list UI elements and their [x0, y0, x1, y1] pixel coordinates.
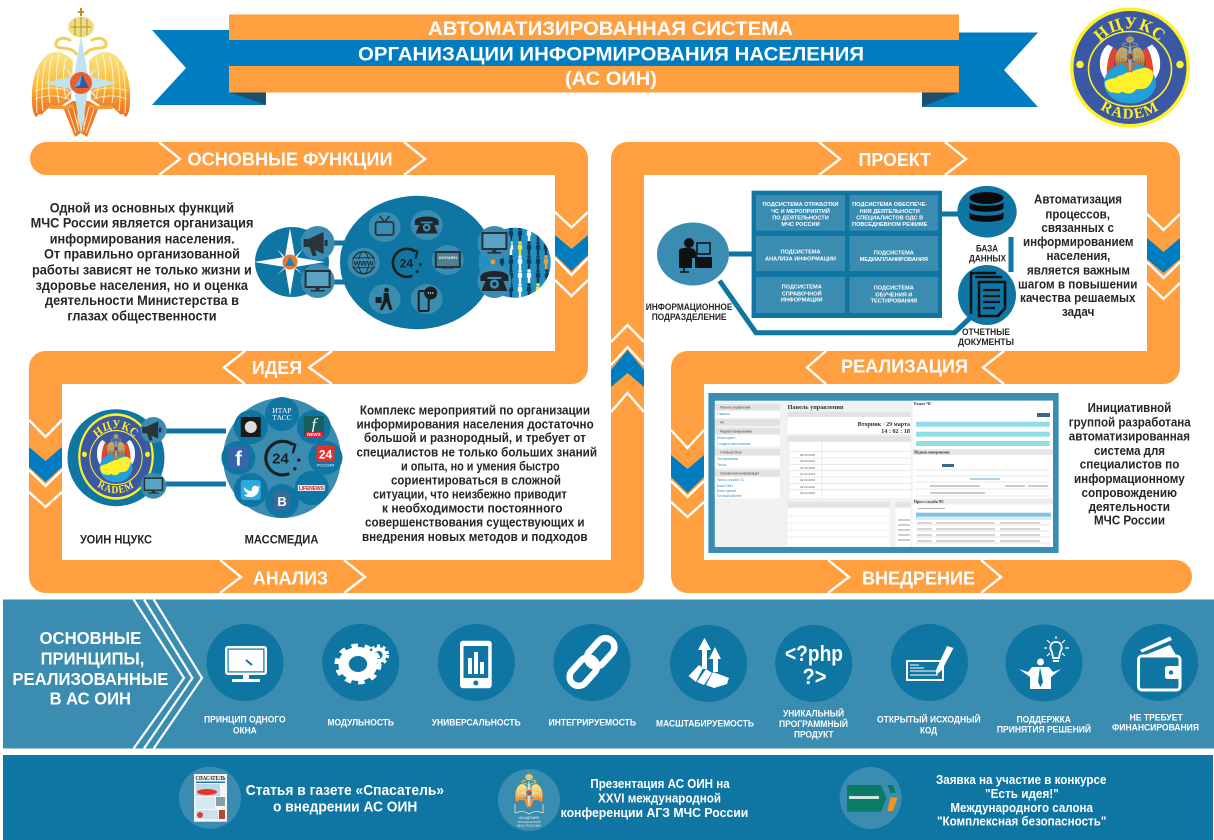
icon: monitor — [477, 226, 511, 260]
text block: idea: ситуации, что неизбежно приводит — [373, 486, 567, 502]
icon: 24 hours — [393, 249, 420, 277]
node: mass media circle — [221, 397, 342, 518]
right area — [913, 402, 1053, 543]
text block: realization: информационному — [1074, 471, 1185, 486]
logo: NCUKS badge: RADEM — [1100, 100, 1158, 119]
label: reports — [958, 327, 1014, 347]
principle: single window: ПРИНЦИП ОДНОГО — [204, 714, 286, 724]
node: UOIN badge: НЦУКС — [92, 420, 138, 438]
heading: idea: ИДЕЯ — [252, 358, 302, 378]
text: conference presentation — [561, 776, 748, 820]
logo: ITAR-TASS: ИТАР — [272, 406, 292, 415]
principle: scalability: МАСШТАБИРУЕМОСТЬ — [656, 718, 755, 728]
sidebar: Тесты — [717, 463, 727, 467]
right area: Медиапланирование — [914, 450, 950, 454]
icon: walking person — [369, 284, 401, 314]
panel: subsystems: МЕДИАПЛАНИРОВАНИЯ — [860, 257, 928, 263]
text block: project: качества решаемых — [1020, 290, 1136, 305]
text block: idea: совершенствования существующих и — [365, 514, 585, 530]
text: conference presentation: конференции АГЗ МЧС России — [561, 805, 748, 820]
logo: F news: f — [312, 415, 319, 434]
panel: subsystems: АНАЛИЗА ИНФОРМАЦИИ — [765, 256, 836, 262]
logo: Twitter — [234, 473, 268, 507]
icon: telephone — [477, 264, 511, 298]
logo: MChS emblem — [32, 8, 130, 137]
sidebar: Мониторинг — [717, 436, 736, 440]
icon: database — [957, 186, 1017, 238]
text block: project: процессов, — [1045, 206, 1110, 222]
text block: project: Автоматизация — [1034, 192, 1122, 206]
panel: subsystems: МЧС РОССИИ — [781, 222, 820, 228]
icon: monitor — [301, 264, 335, 298]
text block: idea: внедрения новых методов и подходов — [362, 529, 588, 544]
main area: 01.04.2016 — [800, 472, 815, 476]
arrow: down chevrons, panel 1 — [555, 212, 588, 296]
title ribbon: (АС ОИН) — [565, 68, 657, 90]
text block: idea: специалистов не только больших знаний — [356, 444, 597, 460]
icon: megaphone — [301, 226, 335, 260]
text block: idea: и опыта, но и умения быстро — [401, 458, 560, 474]
text block: main functions: деятельности Министерства в — [45, 293, 239, 308]
icon: megaphone — [140, 417, 166, 443]
process path: orange snake bands — [46, 158, 1176, 576]
panel: subsystems: ПО ДЕЯТЕЛЬНОСТИ — [772, 216, 829, 222]
principle: single window — [204, 624, 286, 736]
text: conference presentation: XXVI международной — [598, 790, 721, 806]
text block: main functions: Одной из основных функций — [50, 200, 234, 216]
panel: subsystems: СПЕЦИАЛИСТОВ ОДС В — [856, 216, 923, 222]
heading: deployment — [828, 560, 1001, 593]
text block: idea: большой и разнородный, и требует от — [364, 430, 586, 445]
node: UOIN badge: RADEM — [97, 480, 134, 494]
text block: realization: специалистов по — [1080, 456, 1179, 472]
label: database — [969, 244, 1007, 264]
text block: idea: Комплекс мероприятий по организации — [360, 402, 590, 418]
text block: main functions: МЧС России является организация — [31, 216, 253, 230]
label: database: ДАННЫХ — [969, 254, 1007, 264]
panel: subsystems: ТЕСТИРОВАНИЯ — [871, 299, 917, 305]
heading: realization: РЕАЛИЗАЦИЯ — [841, 356, 968, 376]
title ribbon: АВТОМАТИЗИРОВАННАЯ СИСТЕМА — [428, 18, 793, 40]
diagram: project architecture — [646, 186, 1017, 347]
text block: realization: группой разработана — [1069, 414, 1191, 430]
principle: modularity: МОДУЛЬНОСТЬ — [328, 718, 395, 728]
panel: subsystems: СПРАВОЧНОЙ — [782, 289, 822, 297]
node: channels circle — [340, 196, 494, 329]
text: newspaper article — [246, 782, 444, 816]
sidebar: Личный кабинет — [717, 494, 742, 498]
sidebar: Справочная информация — [720, 472, 759, 476]
main area: 04.04.2016 — [800, 491, 815, 495]
label: mass media: МАССМЕДИА — [245, 532, 319, 546]
sidebar: ЧС — [720, 420, 725, 424]
publication: academy logo: МЧС РОССИИ — [517, 824, 541, 828]
label: information unit — [646, 302, 732, 322]
main area: Вторник · 29 марта — [858, 422, 910, 428]
text block: project: задач — [1062, 304, 1094, 319]
text block: main functions — [31, 200, 253, 324]
text block: main functions: глазах общественности — [67, 308, 217, 324]
main area: 31.03.2016 — [800, 466, 815, 470]
title ribbon — [152, 14, 1038, 107]
principle: open source — [877, 624, 981, 736]
text: contest application: "Комплексная безопасность" — [937, 814, 1106, 828]
logo: VK: В — [277, 494, 287, 509]
node: UOIN badge — [68, 409, 164, 506]
logo: 24 Russia: РОССИЯ — [317, 463, 334, 468]
text block: realization: МЧС России — [1094, 512, 1165, 528]
text: contest application: Заявка на участие в конкурсе — [936, 772, 1106, 787]
principle: unique software: ПРОДУКТ — [794, 730, 834, 740]
heading: analysis — [220, 560, 365, 593]
text block: idea: к необходимости постоянного — [382, 500, 563, 516]
text block: project: связанных с — [1041, 220, 1114, 235]
label: reports: ОТЧЕТНЫЕ — [962, 327, 1010, 337]
main area: 29.03.2016 — [800, 459, 815, 463]
label: information unit: ИНФОРМАЦИОННОЕ — [646, 302, 732, 312]
icon: documents — [958, 265, 1016, 325]
principle: unique software: ПРОГРАММНЫЙ — [779, 718, 848, 729]
main area: 28.03.2016 — [800, 453, 815, 457]
right area: Раздел ЧС — [914, 402, 932, 406]
publication: academy logo — [498, 769, 560, 831]
principle: single window: ОКНА — [233, 726, 257, 736]
label: information unit: ПОДРАЗДЕЛЕНИЕ — [652, 312, 726, 322]
text block: idea: сориентироваться в сложной — [391, 472, 561, 488]
logo: ITAR-TASS: ТАСС — [272, 413, 292, 422]
sidebar: Пресс-служба ЧС — [717, 478, 745, 482]
text block: realization: деятельности — [1089, 499, 1170, 514]
text: conference presentation: Презентация АС ОИН на — [590, 776, 730, 791]
icon: 24 hours: 24 — [272, 450, 289, 468]
icon: TV — [369, 212, 401, 242]
diagram: information flow from MChS to population — [254, 196, 551, 329]
text: contest application: Международного салона — [950, 800, 1094, 815]
panel: subsystems: ПОДСИСТЕМА — [782, 285, 822, 291]
icon: online screen: ОНЛАЙН — [439, 256, 457, 260]
principle: unique software: УНИКАЛЬНЫЙ — [783, 708, 844, 718]
panel: publications — [3, 755, 1213, 840]
text block: realization: Инициативной — [1088, 400, 1171, 415]
arrow: down chevrons, project — [1147, 214, 1180, 299]
panel: subsystems: ЧС И МЕРОПРИЯТИЙ — [771, 207, 830, 215]
heading: main functions: ОСНОВНЫЕ ФУНКЦИИ — [188, 150, 392, 170]
text block: main functions: От правильно организованной — [44, 246, 240, 262]
logo: Life News: LIFENEWS — [299, 486, 324, 492]
publication: newspaper: СПАСАТЕЛЬ — [196, 776, 226, 782]
publication: academy logo: ГРАЖДАНСКОЙ — [518, 820, 540, 824]
text block: project: информированием — [1023, 234, 1134, 249]
logo: NCUKS badge — [1070, 8, 1190, 128]
principle: universality — [432, 624, 521, 728]
sidebar: База знаний — [717, 489, 736, 493]
text: newspaper article: о внедрении АС ОИН — [273, 798, 417, 816]
text block: project: является важным — [1027, 262, 1130, 278]
main area: 14 : 02 : 18 — [881, 428, 910, 435]
label: UOIN NCUKS: УОИН НЦУКС — [80, 532, 152, 546]
panel: principles — [3, 600, 1214, 748]
heading: idea — [224, 351, 332, 384]
sidebar: Медиапланирование — [720, 430, 752, 434]
diagram: idea, UOIN to mass media — [68, 397, 342, 546]
icon: telephone — [411, 210, 443, 240]
arrow: down chevrons, idea — [29, 420, 62, 507]
text block: realization: сопровождению — [1082, 485, 1177, 500]
heading: deployment: ВНЕДРЕНИЕ — [862, 568, 975, 588]
sidebar: База СМИ — [717, 484, 733, 488]
icon: 24 hours: 24 — [400, 256, 413, 270]
icon: www globe: WWW — [354, 260, 375, 267]
text: contest application — [936, 772, 1106, 828]
text block: main functions: работы зависят не только жизни и — [32, 262, 252, 278]
heading: realization — [807, 351, 1004, 384]
principle: unique software — [775, 625, 852, 740]
text block: realization — [1069, 400, 1191, 528]
principle: unique software: ?> — [802, 664, 826, 689]
panel: subsystems: ПОВСЕДНЕВНОМ РЕЖИМЕ — [852, 222, 928, 228]
text block: idea: информирования населения достаточно — [356, 416, 594, 432]
principle: open source: КОД — [920, 726, 938, 736]
panel: subsystems: ПОДСИСТЕМА — [874, 286, 914, 292]
node: MChS star — [254, 227, 329, 297]
logo: 24 Russia: 24 — [319, 448, 332, 462]
panel: subsystems: НИЯ ДЕЯТЕЛЬНОСТИ — [860, 209, 920, 215]
icon: mobile with chat — [411, 284, 443, 314]
panel: subsystems: ПОДСИСТЕМА — [874, 250, 914, 256]
principle: open source: ОТКРЫТЫЙ ИСХОДНЫЙ — [877, 714, 981, 724]
main area: 03.04.2016 — [800, 485, 815, 489]
node: population circle — [478, 227, 551, 298]
heading: project: ПРОЕКТ — [858, 150, 931, 170]
principle: no financing: НЕ ТРЕБУЕТ — [1130, 712, 1183, 722]
title ribbon: ОРГАНИЗАЦИИ ИНФОРМИРОВАНИЯ НАСЕЛЕНИЯ — [358, 44, 864, 66]
principle: integrability: ИНТЕГРИРУЕМОСТЬ — [549, 718, 637, 728]
node: information unit — [657, 222, 729, 286]
heading: main functions — [159, 142, 425, 175]
label: reports: ДОКУМЕНТЫ — [958, 337, 1014, 347]
publication: security salon logo — [840, 767, 902, 829]
panel: subsystems: ПОДСИСТЕМА ОТРАБОТКИ — [763, 202, 838, 208]
arrow: down chevrons, realization — [671, 430, 704, 517]
text block: project — [1018, 192, 1137, 319]
text block: main functions: здоровье населения, но и оценка — [36, 278, 248, 293]
sidebar: Тестирование — [717, 457, 739, 461]
logo: F news — [297, 410, 331, 444]
icon: www globe — [348, 248, 380, 278]
panel: subsystems — [752, 191, 942, 318]
main area: Панель управления — [788, 404, 844, 411]
sidebar: Учебный блок — [720, 450, 742, 454]
text block: idea — [356, 402, 597, 544]
principle: modularity — [322, 624, 399, 728]
icon: monitor — [140, 473, 166, 499]
principle: no financing: ФИНАНСИРОВАНИЯ — [1112, 722, 1199, 732]
heading: principles: ОСНОВНЫЕ — [40, 628, 141, 648]
panel: subsystems: ПОДСИСТЕМА ОБЕСПЕЧЕ- — [852, 202, 927, 208]
logo: RIA shell — [234, 410, 268, 444]
principle: universality: УНИВЕРСАЛЬНОСТЬ — [432, 718, 521, 728]
sidebar — [715, 404, 780, 499]
text block: realization: система для — [1094, 443, 1165, 458]
right area: Пресс-служба ЧС — [914, 500, 944, 504]
publication: academy logo: АКАДЕМИЯ — [519, 816, 539, 820]
triple chevron — [134, 600, 202, 748]
heading: analysis: АНАЛИЗ — [253, 568, 328, 588]
arrow: up chevrons, middle column — [611, 325, 644, 412]
label: database: БАЗА — [976, 244, 998, 254]
panel: subsystems: ПОДСИСТЕМА — [780, 250, 821, 256]
text: contest application: "Есть идея!" — [985, 786, 1059, 801]
heading: principles: В АС ОИН — [50, 688, 131, 708]
text block: main functions: информирования населения. — [50, 232, 235, 246]
logo: 24 Russia — [308, 441, 342, 475]
logo: ITAR-TASS — [265, 397, 299, 431]
logo: Facebook: f — [235, 449, 242, 471]
text block: realization: автоматизированная — [1069, 428, 1190, 444]
main area — [788, 404, 911, 547]
heading: principles: ПРИНЦИПЫ, — [41, 648, 144, 668]
heading: principles: РЕАЛИЗОВАННЫЕ — [12, 669, 168, 689]
principle: unique software: <?php — [785, 641, 843, 666]
sidebar: Создать мероприятие — [717, 442, 751, 446]
principle: no financing — [1112, 624, 1199, 732]
panel: subsystems: ИНФОРМАЦИИ — [781, 298, 823, 304]
text: newspaper article: Статья в газете «Спасатель» — [246, 782, 444, 799]
publication: newspaper — [179, 767, 241, 829]
panel: subsystems: ОБУЧЕНИЯ И — [875, 292, 912, 298]
principle: integrability — [549, 624, 637, 728]
heading: principles — [12, 628, 168, 708]
principle: scalability — [656, 625, 755, 728]
icon: online screen — [432, 245, 464, 275]
logo: F news: NEWS — [307, 432, 321, 437]
principle: decision support: ПОДДЕРЖКА — [1017, 714, 1071, 724]
screenshot: control panel — [708, 393, 1059, 553]
text block: project: шагом в повышении — [1018, 276, 1137, 292]
text block: project: населения, — [1046, 248, 1110, 263]
heading: project — [819, 142, 966, 175]
logo: NCUKS badge: НЦУКС — [1092, 17, 1166, 42]
principle: decision support: ПРИНЯТИЯ РЕШЕНИЙ — [997, 724, 1091, 734]
principle: decision support — [997, 624, 1091, 734]
sidebar: Главная — [717, 412, 730, 416]
main area: 02.04.2016 — [800, 478, 815, 482]
sidebar: Панель управления — [720, 406, 751, 410]
